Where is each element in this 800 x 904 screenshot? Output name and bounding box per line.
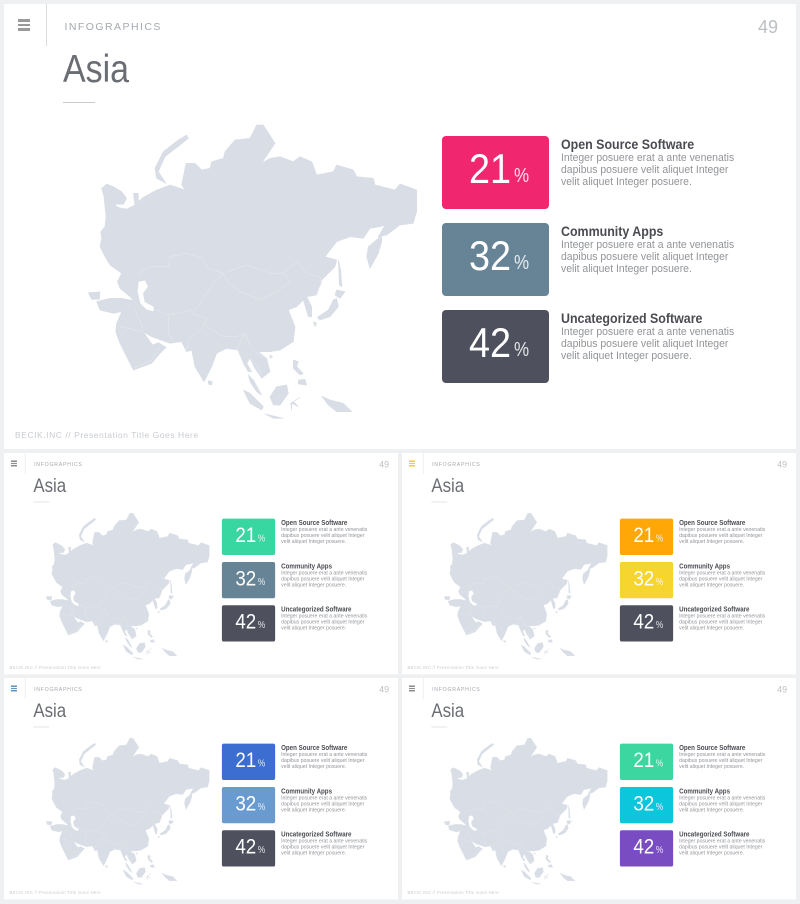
stat heading: Uncategorized Software [561,310,702,326]
percent sign: % [656,845,663,856]
value box [222,562,275,598]
value: 42 [633,609,654,633]
map: Asia [46,513,210,660]
stat description: velit aliquet Integer posuere. [679,764,744,770]
stat description: Integer posuere erat a ante venenatis [281,752,367,758]
stat: open source software [442,136,734,209]
panel: main slide [4,4,796,449]
stat description: Integer posuere erat a ante venenatis [561,239,734,251]
value box [222,605,275,642]
stat description [679,527,765,545]
stat description: Integer posuere erat a ante venenatis [679,752,765,758]
stat heading: Community Apps [679,787,730,795]
stat description: Integer posuere erat a ante venenatis [281,838,367,844]
stat description [679,752,765,770]
stat heading: Open Source Software [281,519,347,527]
value: 21 [235,523,256,546]
stat description [281,752,367,770]
stat: community apps [620,562,765,598]
stat: uncategorized software [620,830,765,866]
stat description: dapibus posuere velit aliquet Integer [679,619,762,625]
value box [222,830,275,867]
stat heading: Community Apps [679,562,730,570]
percent sign: % [656,801,663,812]
header label: INFOGRAPHICS [432,686,481,692]
value: 42 [633,834,654,858]
footer: BECIK.INC // Presentation Title Goes Here [407,890,499,895]
percent sign: % [656,620,663,631]
stat heading: Community Apps [281,562,332,570]
value box [222,744,275,780]
stat description: velit aliquet Integer posuere. [679,539,744,545]
value: 21 [469,144,511,192]
stat heading: Open Source Software [561,136,694,152]
value: 21 [633,748,654,771]
stat: uncategorized software [222,830,367,866]
stat description [561,239,734,275]
stat: open source software [222,744,367,780]
stat description: velit aliquet Integer posuere. [281,807,346,813]
stat heading: Open Source Software [679,744,745,752]
percent sign: % [514,252,529,274]
stat description: Integer posuere erat a ante venenatis [561,326,734,338]
stat heading: Uncategorized Software [679,605,749,613]
page number: 49 [758,17,778,37]
stat description: dapibus posuere velit aliquet Integer [281,801,364,807]
stat description [679,838,765,856]
stat description [561,326,734,362]
percent sign: % [258,576,265,587]
value box [620,519,673,555]
stat description [679,795,765,813]
stat description: dapibus posuere velit aliquet Integer [561,338,728,350]
value: 21 [235,748,256,771]
page number: 49 [379,459,389,469]
value: 42 [235,834,256,858]
stat description [561,152,734,188]
value: 32 [235,566,256,590]
stat description [281,527,367,545]
value: 42 [469,318,511,366]
footer: BECIK.INC // Presentation Title Goes Here [9,890,101,895]
icon: menu [408,460,415,466]
stat description: Integer posuere erat a ante venenatis [679,795,765,801]
value box [620,830,673,867]
percent sign: % [514,339,529,361]
icon: menu [18,19,30,31]
stat description: velit aliquet Integer posuere. [561,263,692,275]
percent sign: % [656,758,663,769]
stat description [281,570,367,588]
stat description: velit aliquet Integer posuere. [281,850,346,856]
stat heading: Community Apps [281,787,332,795]
value box [222,787,275,823]
stat description: dapibus posuere velit aliquet Integer [281,619,364,625]
panel: blue variant [4,678,398,899]
value: 32 [633,791,654,815]
stat description: Integer posuere erat a ante venenatis [281,527,367,533]
stat description: Integer posuere erat a ante venenatis [679,613,765,619]
stat description: dapibus posuere velit aliquet Integer [281,758,364,764]
header label: INFOGRAPHICS [64,21,162,33]
percent sign: % [258,845,265,856]
stat: community apps [442,223,734,296]
stat: community apps [222,787,367,824]
value box [222,519,275,555]
stat description: velit aliquet Integer posuere. [679,582,744,588]
value box [442,223,549,296]
stat description [679,570,765,588]
stat description [281,613,367,631]
footer: BECIK.INC // Presentation Title Goes Here [9,665,101,670]
percent sign: % [656,576,663,587]
stat description: Integer posuere erat a ante venenatis [281,613,367,619]
stat description: velit aliquet Integer posuere. [561,350,692,362]
percent sign: % [514,165,529,187]
value: 32 [469,232,511,278]
stat description: Integer posuere erat a ante venenatis [281,795,367,801]
stat description: dapibus posuere velit aliquet Integer [679,758,762,764]
map: Asia [444,738,608,884]
value: 42 [235,609,256,633]
percent sign: % [258,620,265,631]
stat description: Integer posuere erat a ante venenatis [679,527,765,533]
value: 21 [633,523,654,546]
stat description: velit aliquet Integer posuere. [679,807,744,813]
value box [620,787,673,823]
footer: BECIK.INC // Presentation Title Goes Here [15,430,199,440]
stat: community apps [620,787,765,824]
stat description: Integer posuere erat a ante venenatis [281,570,367,576]
stat description: dapibus posuere velit aliquet Integer [679,801,762,807]
stat description: dapibus posuere velit aliquet Integer [561,164,728,176]
stat description: velit aliquet Integer posuere. [281,764,346,770]
stat: open source software [222,518,367,555]
stat description [281,838,367,856]
stat: open source software [620,518,765,555]
icon: menu [10,685,17,692]
title: Asia [33,475,66,496]
stat description: dapibus posuere velit aliquet Integer [281,576,364,582]
page number: 49 [777,684,787,694]
title: Asia [63,48,129,91]
stat description: velit aliquet Integer posuere. [679,625,744,631]
panel: orange variant [402,453,796,674]
header label: INFOGRAPHICS [432,461,481,467]
page number: 49 [777,459,787,469]
stat description: Integer posuere erat a ante venenatis [679,570,765,576]
map: Asia [444,513,608,660]
stat: uncategorized software [442,310,734,383]
percent sign: % [258,758,265,769]
stat description: velit aliquet Integer posuere. [679,850,744,856]
value box [620,605,673,642]
stat heading: Uncategorized Software [679,830,749,838]
value: 32 [633,566,654,590]
stat description: dapibus posuere velit aliquet Integer [281,844,364,850]
stat: uncategorized software [222,605,367,642]
stat description: velit aliquet Integer posuere. [281,625,346,631]
stat description: dapibus posuere velit aliquet Integer [679,576,762,582]
percent sign: % [656,533,663,544]
header label: INFOGRAPHICS [34,461,83,467]
icon: menu [409,685,415,692]
stat description: velit aliquet Integer posuere. [281,539,346,545]
stat description: dapibus posuere velit aliquet Integer [679,533,762,539]
value box [442,136,549,209]
stat: uncategorized software [620,605,765,642]
stat: open source software [620,744,765,780]
stat heading: Community Apps [561,223,663,239]
stat description: dapibus posuere velit aliquet Integer [281,533,364,539]
stat description [281,795,367,813]
title: Asia [33,700,66,721]
stat description: Integer posuere erat a ante venenatis [561,152,734,164]
footer: BECIK.INC // Presentation Title Goes Here [407,665,499,670]
percent sign: % [258,801,265,812]
map: Asia [46,738,210,884]
value box [620,744,673,780]
icon: menu [11,460,17,466]
stat heading: Uncategorized Software [281,605,351,613]
value box [620,562,673,598]
panel: teal and purple variant [402,678,796,899]
percent sign: % [258,533,265,544]
map: Asia [88,124,417,419]
stat description: velit aliquet Integer posuere. [561,176,692,188]
stat heading: Uncategorized Software [281,830,351,838]
stat description: dapibus posuere velit aliquet Integer [679,844,762,850]
stat description: Integer posuere erat a ante venenatis [679,838,765,844]
stat heading: Open Source Software [679,519,745,527]
stat description [679,613,765,631]
value box [442,310,549,383]
title: Asia [431,700,464,721]
value: 32 [235,791,256,815]
header label: INFOGRAPHICS [34,686,83,692]
panel: green variant [4,453,398,674]
stat heading: Open Source Software [281,744,347,752]
title: Asia [431,475,464,496]
page number: 49 [379,684,389,694]
stat description: velit aliquet Integer posuere. [281,582,346,588]
stat: community apps [222,562,367,598]
stat description: dapibus posuere velit aliquet Integer [561,251,728,263]
